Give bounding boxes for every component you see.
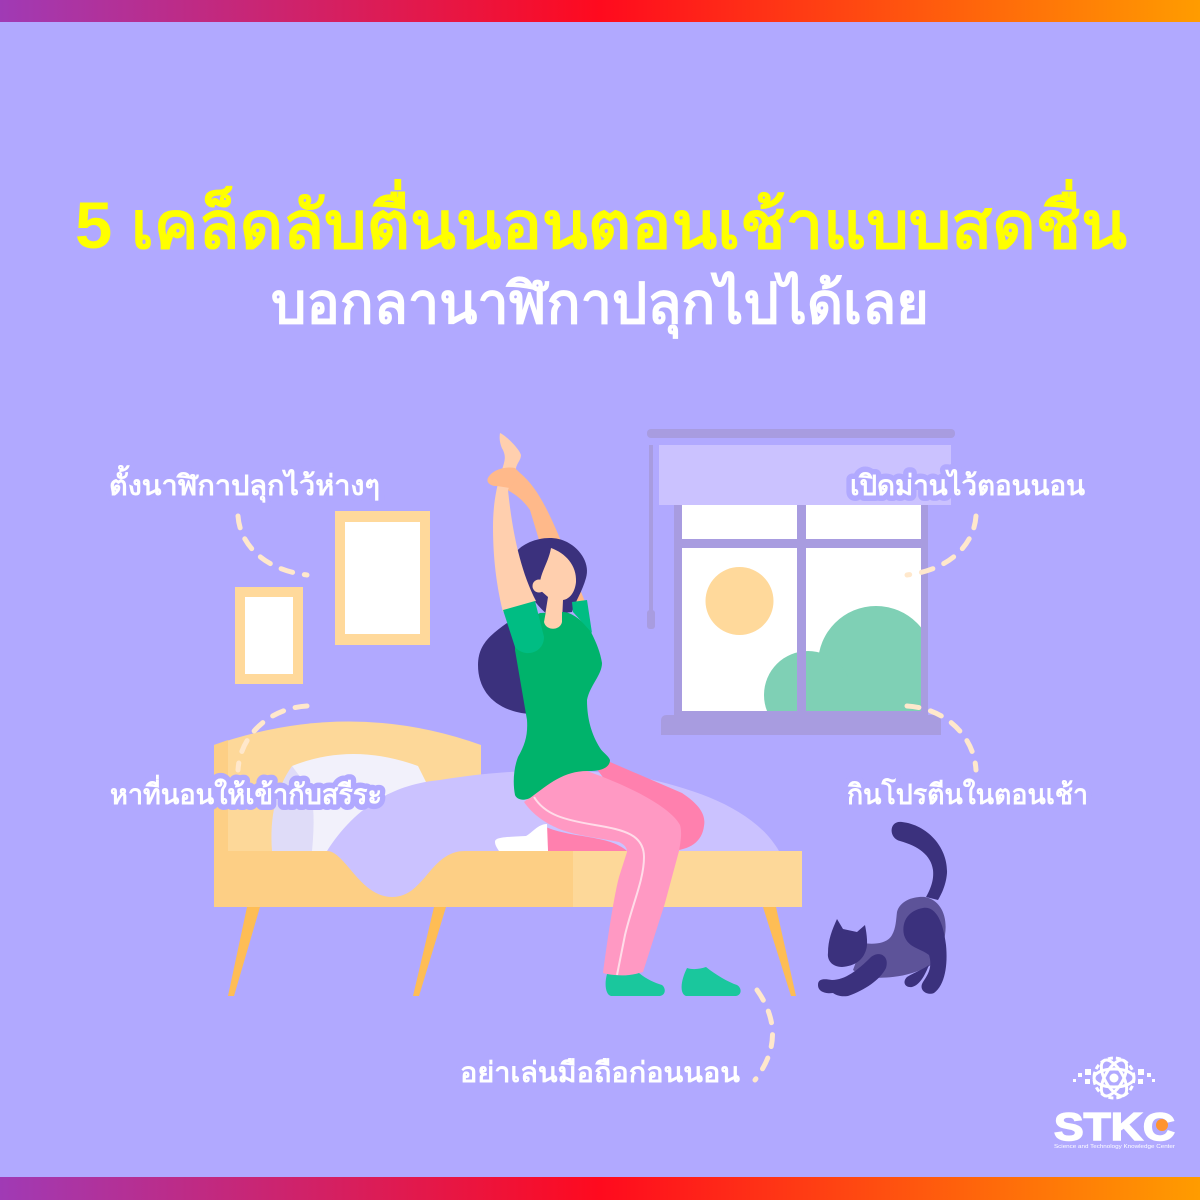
logo wordmark: STKC <box>1054 1106 1175 1149</box>
dashed connector: protein <box>907 706 976 770</box>
dashed connector: alarm <box>238 516 307 575</box>
label: alarm: ตั้งนาฬิกาปลุกไว้ห่างๆ <box>109 464 380 503</box>
near arm and hand <box>493 433 536 612</box>
face and neck <box>540 548 576 629</box>
sock <box>495 824 548 851</box>
wall picture frames <box>235 511 430 684</box>
headboard <box>214 722 481 860</box>
sun <box>706 567 774 635</box>
label: phone: อย่าเล่นมือถือก่อนนอน <box>460 1057 740 1088</box>
window with curtain <box>647 429 955 739</box>
slippers <box>606 967 741 996</box>
hair <box>515 538 587 615</box>
logo atom icon <box>1094 1056 1134 1100</box>
tail <box>892 822 947 900</box>
label: mattress: หาที่นอนให้เข้ากับสรีระ <box>110 774 382 810</box>
cat <box>818 822 947 996</box>
subtitle: บอกลานาฬิกาปลุกไปได้เลย <box>271 271 929 340</box>
bushes <box>764 606 921 711</box>
logo pixels <box>1073 1069 1155 1084</box>
label: curtain: เปิดม่านไว้ตอนนอน <box>850 469 1085 501</box>
cat head <box>828 919 867 967</box>
bed <box>214 722 802 996</box>
ear <box>532 580 546 592</box>
neck over shirt <box>544 600 562 629</box>
bed frame <box>214 851 573 907</box>
top gradient bar <box>0 0 1200 22</box>
shirt <box>514 612 610 800</box>
label: protein: กินโปรตีนในตอนเช้า <box>847 777 1088 810</box>
pillow <box>292 754 440 851</box>
blanket <box>327 771 779 897</box>
sleeves <box>503 600 592 653</box>
dashed connector: phone <box>755 990 773 1080</box>
title: 5 เคล็ดลับตื่นนอนตอนเช้าแบบสดชื่น <box>75 178 1127 262</box>
back leg <box>546 760 704 851</box>
dashed connector: mattress <box>238 706 307 770</box>
front legs <box>818 954 887 996</box>
bottom gradient bar <box>0 1177 1200 1200</box>
far arm <box>487 469 585 610</box>
dashed connector: curtain <box>907 516 976 575</box>
logo dot <box>1156 1119 1168 1131</box>
pants stripe <box>534 797 644 975</box>
logo tagline: Science and Technology Knowledge Center <box>1054 1144 1175 1150</box>
bed legs <box>228 907 796 996</box>
logo <box>1054 1056 1175 1150</box>
front leg <box>524 771 681 976</box>
cat body <box>853 897 946 978</box>
haunch and hind legs <box>903 908 947 994</box>
woman stretching <box>478 433 741 996</box>
